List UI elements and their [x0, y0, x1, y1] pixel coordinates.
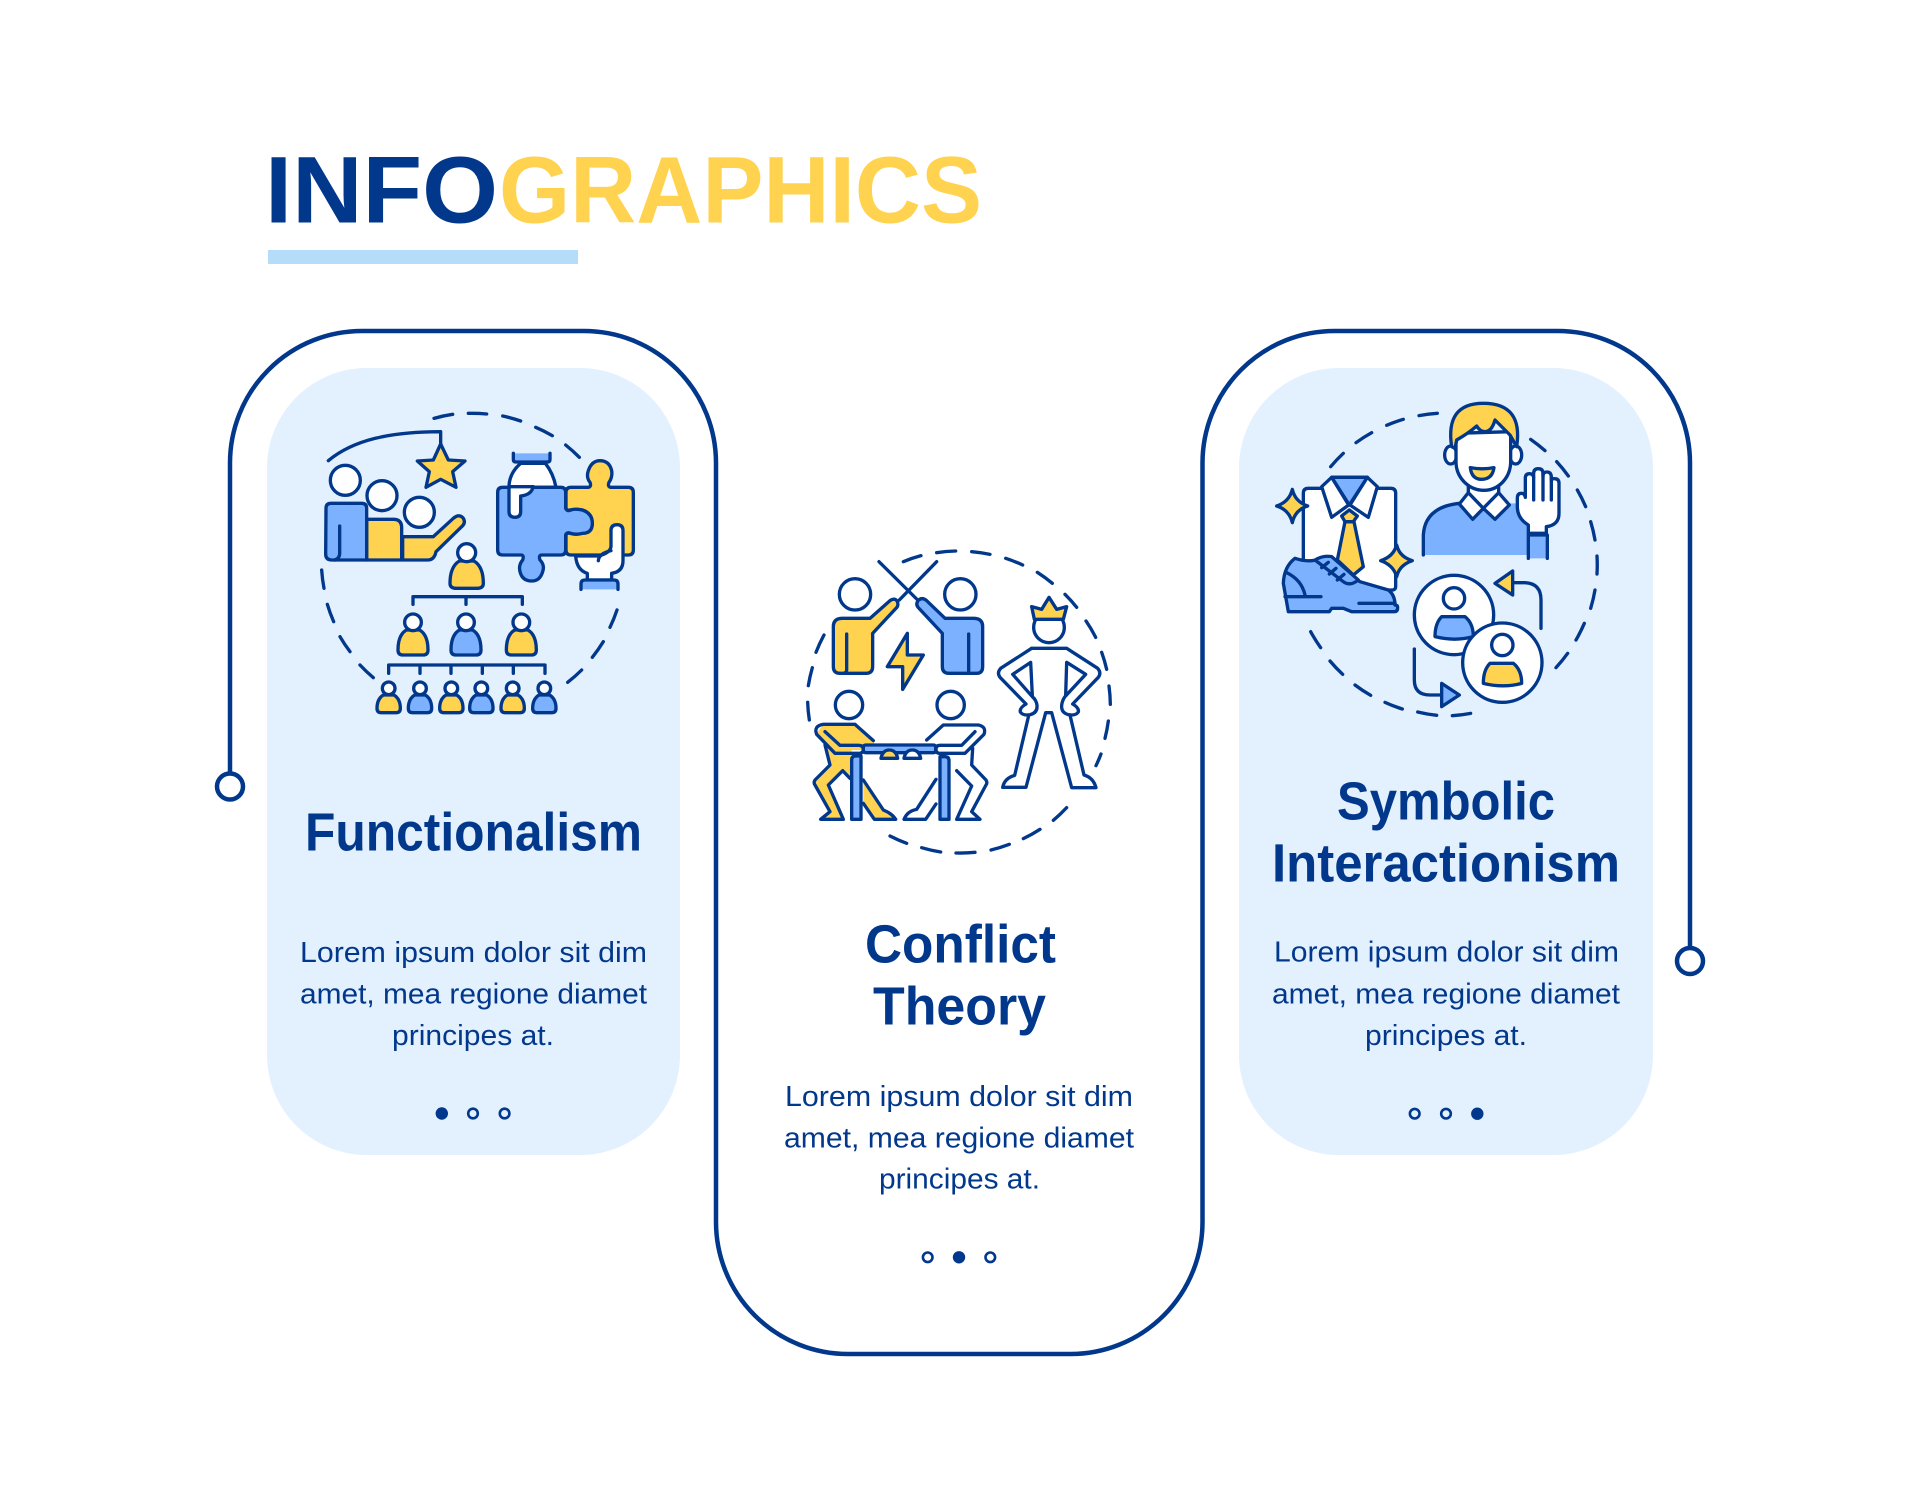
text: functionalism body: Lorem ipsum dolor sit dim [300, 937, 647, 969]
text: conflict theory body: Lorem ipsum dolor sit dim [785, 1081, 1133, 1113]
pagination dots: first [436, 1107, 509, 1120]
connecting outline [230, 331, 1690, 1354]
heading: conflict theory: Theory [873, 976, 1046, 1036]
text: symbolic interactionism body: amet, mea regione diamet [1272, 979, 1620, 1011]
text: symbolic interactionism body: principes at. [1365, 1020, 1527, 1052]
start node [217, 774, 243, 800]
text: functionalism body [300, 937, 647, 1052]
text: symbolic interactionism body: Lorem ipsum dolor sit dim [1274, 937, 1619, 969]
icon: conflict theory [808, 551, 1110, 853]
end node [1677, 948, 1703, 974]
heading: symbolic interactionism: Symbolic [1337, 771, 1555, 831]
title: INFO [265, 138, 498, 244]
text: functionalism body: principes at. [392, 1020, 554, 1052]
icon: symbolic interactionism [1277, 403, 1597, 716]
icon: functionalism [322, 413, 633, 713]
title: GRAPHICS [499, 138, 982, 244]
text: functionalism body: amet, mea regione diamet [300, 979, 647, 1011]
heading: symbolic interactionism: Interactionism [1272, 834, 1620, 894]
heading: symbolic interactionism [1272, 771, 1620, 894]
text: conflict theory body: principes at. [879, 1164, 1040, 1196]
text: conflict theory body: amet, mea regione diamet [784, 1122, 1134, 1154]
heading: conflict theory [865, 914, 1056, 1036]
heading: functionalism: Functionalism [305, 803, 642, 863]
text: symbolic interactionism body [1272, 937, 1620, 1052]
panel: symbolic interactionism background [1239, 368, 1653, 1155]
title [265, 138, 982, 244]
pagination dots: second [923, 1251, 995, 1264]
text: conflict theory body [784, 1081, 1134, 1196]
pagination dots: third [1410, 1108, 1484, 1120]
title underline [268, 250, 578, 264]
panel: functionalism background [267, 368, 680, 1155]
heading: conflict theory: Conflict [865, 914, 1056, 974]
